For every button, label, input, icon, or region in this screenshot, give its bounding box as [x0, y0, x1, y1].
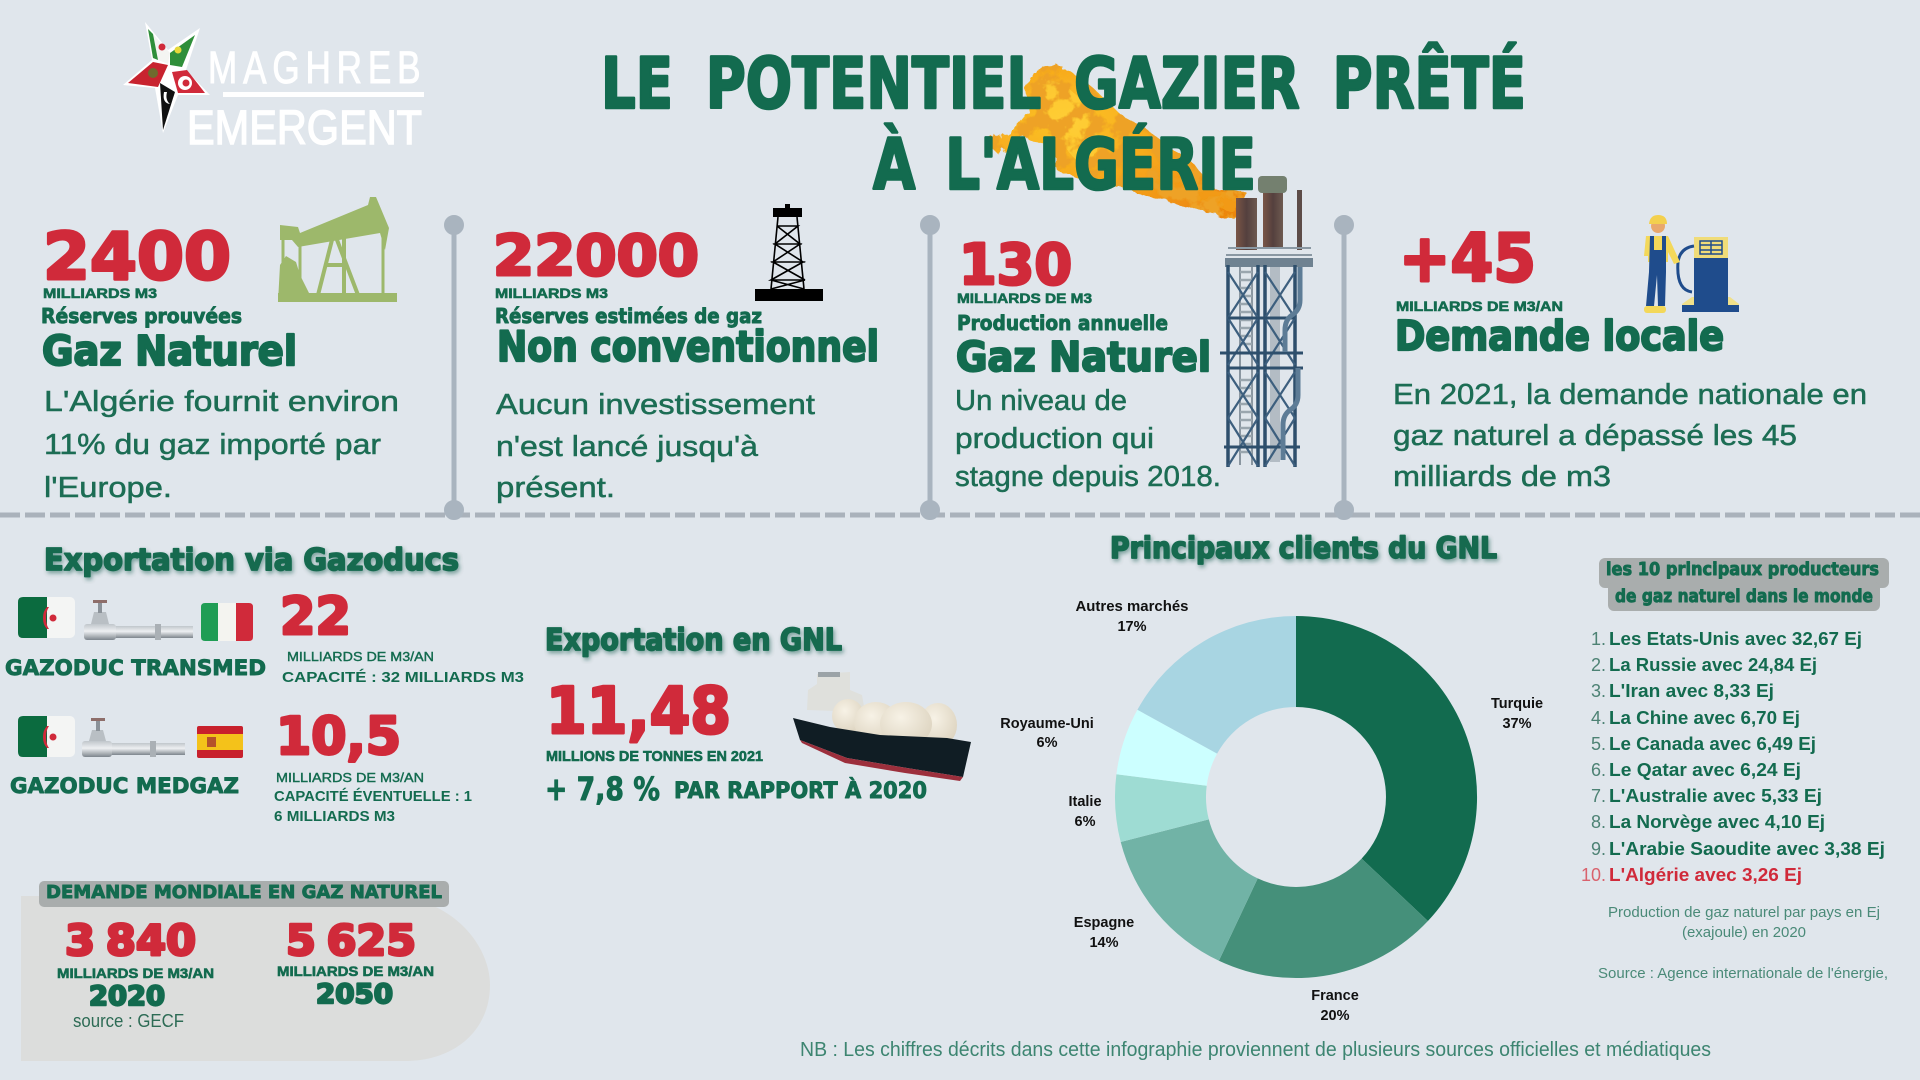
data labels	[1000, 599, 1543, 1024]
ranked list: 6.	[1591, 760, 1606, 780]
heading: Gaz Naturel	[42, 327, 297, 375]
panel background	[21, 896, 490, 1061]
unit: MILLIARDS DE M3/AN	[1396, 298, 1563, 314]
icon: flare tower	[1220, 176, 1313, 467]
unit: MILLIARDS DE M3/AN	[276, 770, 424, 785]
ranked list: Le Canada avec 6,49 Ej	[1609, 734, 1816, 754]
heading	[1606, 559, 1879, 607]
description: Aucun investissement	[496, 389, 815, 421]
panel: LNG customers donut	[1000, 531, 1543, 1024]
heading: Exportation en GNL	[545, 623, 842, 658]
panel: LNG exports	[545, 623, 971, 808]
title: À L'ALGÉRIE	[873, 124, 1256, 206]
stat 22: 22	[280, 587, 351, 647]
description: n'est lancé jusqu'à	[496, 431, 759, 463]
icon: derrick	[755, 204, 823, 301]
banner	[39, 881, 449, 907]
panel: estimated unconventional reserves	[493, 204, 879, 504]
stat 2050: MILLIARDS DE M3/AN	[277, 963, 434, 979]
description	[496, 389, 815, 504]
data labels: Italie	[1068, 794, 1102, 810]
stat 2020: 3 840	[65, 916, 196, 965]
footnote: NB : Les chiffres décrits dans cette infographie proviennent de plusieurs sources officielles et médiatiques	[800, 1039, 1711, 1061]
stat 11,48: 11,48	[546, 675, 731, 749]
ranked list	[1581, 629, 1885, 885]
ranked list: L'Iran avec 8,33 Ej	[1609, 681, 1774, 701]
logo: Maghreb Emergent	[123, 22, 426, 155]
comparison: PAR RAPPORT À 2020	[674, 778, 927, 804]
logo wordmark: EMERGENT	[187, 102, 422, 155]
stat 2400: 2400	[43, 220, 231, 295]
stat +45: +45	[1399, 220, 1536, 297]
capacity: 6 MILLIARDS M3	[274, 808, 395, 825]
description	[44, 386, 399, 504]
description: présent.	[496, 472, 615, 504]
unit: MILLIARDS M3	[43, 285, 157, 301]
heading: les 10 principaux producteurs	[1606, 559, 1879, 580]
description	[955, 385, 1221, 493]
icon: Algerian flag	[18, 597, 75, 638]
heading: Gaz Naturel	[956, 333, 1211, 381]
unit: MILLIARDS DE M3/AN	[287, 649, 434, 664]
source: Source : Agence internationale de l'énergie,	[1598, 965, 1888, 982]
description: En 2021, la demande nationale en	[1393, 379, 1867, 411]
panel: local demand	[1393, 215, 1867, 493]
data labels: 20%	[1320, 1008, 1350, 1024]
icon: pipeline valve	[84, 600, 193, 640]
stat 2020: MILLIARDS DE M3/AN	[57, 965, 214, 981]
ranked list: 2.	[1591, 655, 1606, 675]
ranked list: La Chine avec 6,70 Ej	[1609, 708, 1800, 728]
logo wordmark: MAGHREB	[208, 42, 426, 93]
growth: + 7,8 %	[545, 770, 660, 808]
ranked list: L'Australie avec 5,33 Ej	[1609, 786, 1822, 806]
ranked list: 9.	[1591, 839, 1606, 859]
ranked list: 3.	[1591, 681, 1606, 701]
stat 10,5: 10,5	[276, 707, 401, 767]
description: l'Europe.	[44, 472, 172, 504]
data labels: Royaume-Uni	[1000, 716, 1094, 732]
unit: MILLIONS DE TONNES EN 2021	[546, 748, 763, 765]
icon: Algerian flag	[18, 716, 75, 757]
ranked list: Les Etats-Unis avec 32,67 Ej	[1609, 629, 1862, 649]
icon: Spanish flag	[197, 726, 243, 758]
data labels: 37%	[1502, 716, 1532, 732]
description: L'Algérie fournit environ	[44, 386, 399, 418]
ranked list: L'Algérie avec 3,26 Ej	[1609, 865, 1802, 885]
ranked list: Le Qatar avec 6,24 Ej	[1609, 760, 1801, 780]
chart note: (exajoule) en 2020	[1682, 924, 1806, 941]
data labels: Espagne	[1074, 915, 1134, 931]
ranked list: 7.	[1591, 786, 1606, 806]
description: Un niveau de	[955, 385, 1127, 417]
heading: Exportation via Gazoducs	[44, 543, 459, 578]
capacity: CAPACITÉ ÉVENTUELLE : 1	[274, 788, 472, 805]
flame illustration	[987, 66, 1247, 220]
description: stagne depuis 2018.	[955, 461, 1221, 493]
icon: worker at fuel pump	[1644, 215, 1739, 313]
banner	[1599, 558, 1889, 611]
stat 2050: 5 625	[286, 916, 416, 965]
stat 2020: source : GECF	[73, 1011, 184, 1031]
panel: world demand	[21, 881, 490, 1061]
panel: annual production	[955, 176, 1313, 493]
separators: vertical timeline lines and dashed divider	[0, 218, 1920, 518]
ranked list: 8.	[1591, 812, 1606, 832]
unit: MILLIARDS M3	[495, 285, 608, 301]
icon: Italian flag	[201, 603, 253, 641]
stat 2020	[57, 916, 214, 1031]
panel: top 10 gas producers	[1581, 558, 1889, 982]
stat 2050: 2050	[316, 979, 393, 1010]
icon: pipeline valve	[82, 718, 185, 757]
heading: Non conventionnel	[497, 322, 879, 371]
icon: pumpjack	[278, 197, 397, 302]
ranked list: La Russie avec 24,84 Ej	[1609, 655, 1817, 675]
title: LE POTENTIEL GAZIER PRÊTÉ	[601, 43, 1526, 125]
logo wordmark	[187, 42, 426, 155]
ranked list: 5.	[1591, 734, 1606, 754]
description: 11% du gaz importé par	[44, 429, 381, 461]
description: production qui	[955, 423, 1154, 455]
data labels: 14%	[1089, 935, 1119, 951]
stat 130: 130	[959, 233, 1072, 298]
capacity	[274, 788, 472, 825]
heading: de gaz naturel dans le monde	[1615, 586, 1873, 607]
data labels: 6%	[1075, 814, 1096, 830]
description: gaz naturel a dépassé les 45	[1393, 420, 1797, 452]
heading: Principaux clients du GNL	[1110, 531, 1497, 565]
title	[601, 43, 1526, 206]
data labels: Turquie	[1491, 696, 1543, 712]
label: Réserves prouvées	[41, 304, 242, 328]
label: Réserves estimées de gaz	[495, 304, 762, 328]
stat 22000: 22000	[493, 224, 699, 289]
description	[1393, 379, 1867, 493]
unit: MILLIARDS DE M3	[957, 290, 1092, 306]
data labels: 17%	[1117, 619, 1147, 635]
panel: proven reserves	[41, 197, 399, 504]
panel: pipeline exports	[5, 543, 524, 825]
label: Production annuelle	[957, 311, 1168, 335]
capacity: CAPACITÉ : 32 MILLIARDS M3	[282, 669, 524, 686]
heading: DEMANDE MONDIALE EN GAZ NATUREL	[46, 882, 442, 903]
label: Transmed: GAZODUC TRANSMED	[5, 656, 266, 680]
chart note: Production de gaz naturel par pays en Ej	[1608, 904, 1880, 921]
heading: Demande locale	[1395, 312, 1724, 360]
chart note	[1608, 904, 1880, 941]
ranked list: L'Arabie Saoudite avec 3,38 Ej	[1609, 839, 1885, 859]
stat 2020: 2020	[89, 981, 165, 1012]
data labels: France	[1311, 988, 1359, 1004]
icon: LNG tanker	[793, 672, 971, 781]
data labels: 6%	[1037, 735, 1058, 751]
data labels: Autres marchés	[1076, 599, 1188, 615]
description: milliards de m3	[1393, 461, 1611, 493]
ranked list: 4.	[1591, 708, 1606, 728]
stat 2050	[277, 916, 434, 1010]
donut chart	[1115, 616, 1477, 978]
ranked list: La Norvège avec 4,10 Ej	[1609, 812, 1825, 832]
ranked list: 10.	[1581, 865, 1606, 885]
label: Medgaz: GAZODUC MEDGAZ	[10, 774, 239, 798]
ranked list: 1.	[1591, 629, 1606, 649]
